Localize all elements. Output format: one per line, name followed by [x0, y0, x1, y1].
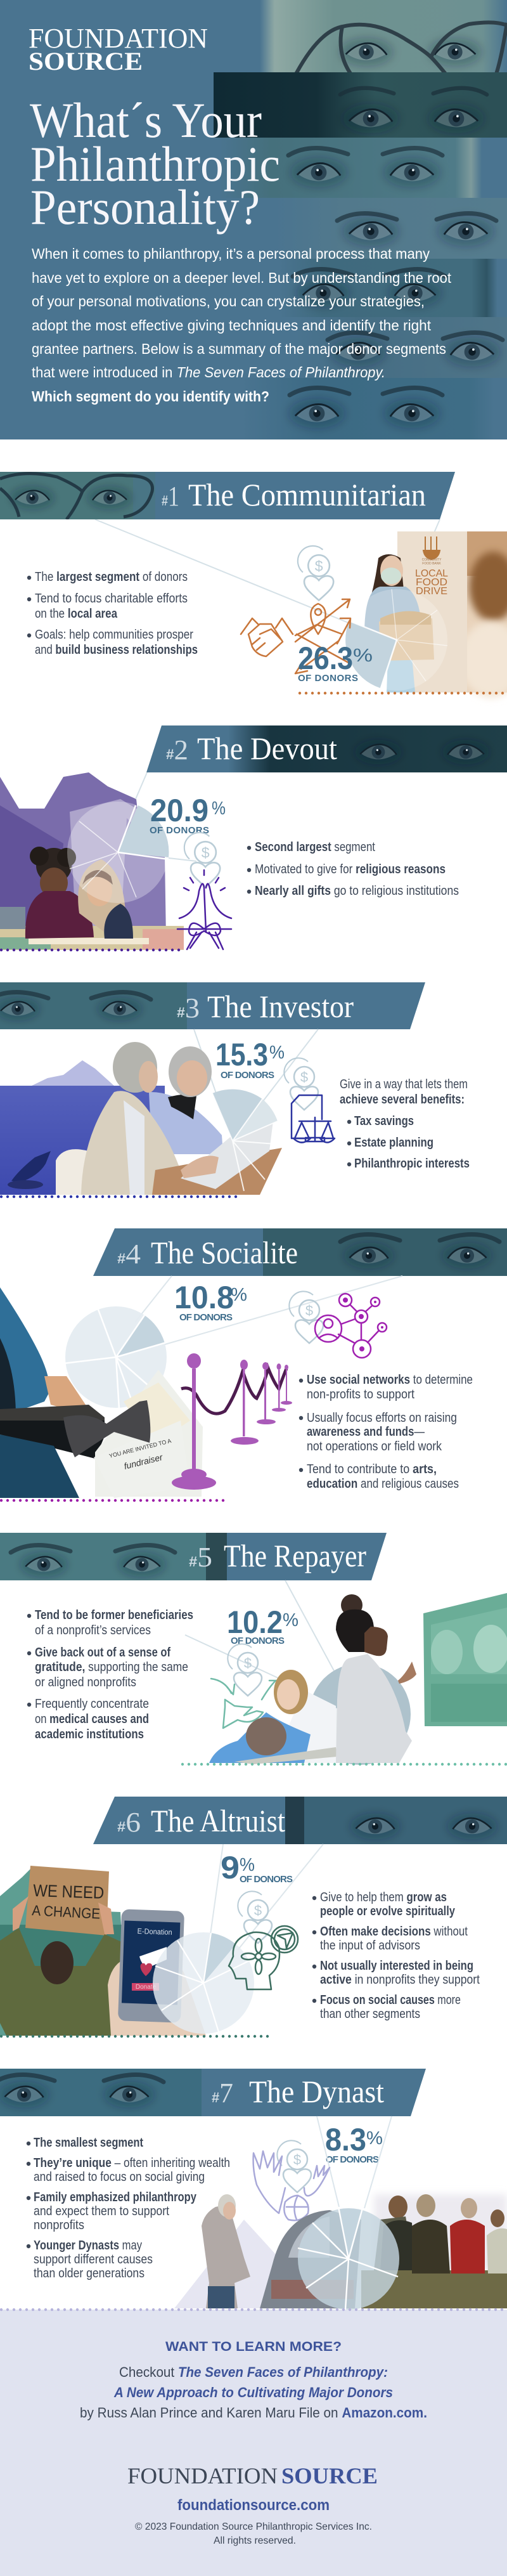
icons: dollar and head with flower and compass	[229, 1891, 298, 1989]
bullets: Tend to contribute to arts,	[307, 1462, 437, 1476]
book recommendation: A New Approach to Cultivating Major Donors	[113, 2384, 393, 2400]
intro text: have yet to explore on a deeper level. But by understanding the root	[32, 270, 452, 286]
header band: The Dynast	[249, 2074, 384, 2109]
copyright	[135, 2521, 372, 2546]
photo: phone with E-Donation: Donate	[136, 1984, 157, 1991]
connector lines	[185, 1580, 336, 1690]
pie chart	[67, 772, 196, 903]
panel: #3 The Investor	[0, 982, 470, 1197]
title: What´s Your	[30, 93, 262, 148]
photo: protester with sign: WE NEED	[33, 1881, 105, 1903]
text block: Tax savings	[354, 1114, 414, 1128]
connector lines	[317, 2116, 392, 2208]
stat: 8.3%: 8.3	[325, 2122, 366, 2157]
book recommendation	[80, 2364, 427, 2421]
header band	[0, 472, 455, 519]
panel: footer	[0, 2310, 507, 2576]
book recommendation: Checkout The Seven Faces of Philanthropy:	[119, 2364, 388, 2380]
website: foundationsource.com	[177, 2497, 330, 2514]
icons: dollar, pin, arrows and handshake	[241, 546, 350, 673]
hero face strip 3	[240, 138, 480, 198]
panel: #5 The Repayer	[0, 1533, 507, 1765]
logo: Foundation Source: FOUNDATION	[29, 23, 208, 54]
photo: phone with E-Donation: E-Donation	[137, 1927, 172, 1937]
pie chart	[345, 589, 447, 691]
intro text: that were introduced in The Seven Faces of Philanthropy.	[32, 364, 385, 381]
logo: Foundation Source: FOUNDATION	[127, 2463, 278, 2488]
connector lines	[135, 1276, 402, 1344]
header band: The Devout	[197, 731, 337, 766]
photo: phone with E-Donation	[108, 1909, 206, 2036]
panel: #7 The Dynast	[0, 2069, 507, 2310]
photo: protester with sign	[0, 1866, 127, 2036]
bullets: Usually focus efforts on raising	[307, 1410, 457, 1425]
bullets: Use social networks to determine	[307, 1372, 473, 1387]
photo: food drive: COMMUNITY	[422, 558, 442, 562]
bullets: Give to help them grow as	[320, 1890, 447, 1904]
text block: Give in a way that lets them	[340, 1077, 468, 1091]
photo: protester with sign: A CHANGE	[32, 1902, 101, 1922]
bullets	[247, 840, 459, 898]
bullets: Nearly all gifts go to religious institutions	[255, 883, 459, 898]
dotted rule	[300, 692, 507, 694]
bullets: on the local area	[35, 606, 117, 621]
text block: Estate planning	[354, 1135, 433, 1150]
header band: The Investor	[207, 989, 354, 1024]
bullets: Focus on social causes more	[320, 1993, 461, 2007]
dotted rule	[1, 2308, 507, 2311]
dotted rule	[1, 2035, 269, 2038]
pie chart	[309, 1663, 411, 1765]
hero face strip 2	[214, 72, 507, 138]
bullets: the input of advisors	[320, 1938, 420, 1953]
photo: food drive: FOOD BANK	[422, 562, 441, 566]
stat: 15.3%: %	[269, 1043, 285, 1063]
dotted rule	[1, 949, 184, 951]
photo: food drive: LOCAL	[415, 568, 448, 579]
header band: #3	[177, 992, 200, 1024]
bullets	[312, 1890, 480, 2021]
bullets: Give back out of a sense of	[35, 1645, 170, 1660]
stat: 9%: %	[240, 1855, 255, 1875]
stat: 10.8%	[174, 1280, 247, 1323]
stat: 15.3%: 15.3	[215, 1037, 268, 1072]
bullets: of a nonprofit’s services	[35, 1623, 151, 1637]
hero face strip 6	[324, 317, 507, 378]
connector lines	[95, 519, 440, 623]
stat: 10.2%: %	[283, 1610, 298, 1630]
bullets: gratitude, supporting the same	[35, 1660, 188, 1674]
icons: dollar and network	[289, 1291, 387, 1358]
connector lines	[210, 1844, 323, 1950]
bullets: Family emphasized philanthropy	[34, 2190, 196, 2204]
text block	[340, 1077, 470, 1171]
bullets: and build business relationships	[35, 642, 198, 657]
panel: #2 The Devout	[0, 725, 507, 950]
icon: dollar and giving hand	[211, 1644, 282, 1728]
bullets: support different causes	[34, 2252, 153, 2267]
bullets: not operations or field work	[307, 1439, 442, 1454]
icons: dollar and scales	[284, 1058, 335, 1143]
photo: family seated on stone wall	[361, 2194, 507, 2308]
bullets: Often make decisions without	[320, 1924, 468, 1939]
bullets: Goals: help communities prosper	[35, 627, 193, 642]
icons: dollar and praying hands with bow	[177, 833, 231, 949]
photo: invitation with bow tie and stanchions	[63, 1353, 292, 1498]
copyright: All rights reserved.	[214, 2535, 296, 2546]
photo: doctor and brain scan	[336, 1593, 507, 1763]
hero face strip 4	[335, 198, 507, 259]
logo: Foundation Source	[127, 2463, 378, 2488]
stat: 10.2%: 10.2	[227, 1604, 283, 1640]
photo: food drive: DRIVE	[416, 586, 447, 597]
panel: #1 The Communitarian	[0, 472, 507, 698]
intro text: adopt the most effective giving techniques and identify the right	[32, 317, 432, 334]
bullets: Frequently concentrate	[35, 1696, 149, 1711]
header band: The Communitarian	[188, 477, 426, 512]
pie chart	[298, 2207, 399, 2310]
pie chart	[63, 1306, 167, 1409]
bullets	[27, 1608, 193, 1741]
photo: invitation with bow tie and stanchions: fundraiser	[123, 1452, 164, 1471]
bullets: on medical causes and	[35, 1712, 149, 1726]
stat: 8.3%: OF DONORS	[326, 2154, 379, 2165]
header band: #5	[189, 1542, 212, 1573]
pie chart	[153, 1932, 254, 2034]
bullets: awareness and funds—	[307, 1424, 425, 1439]
header band	[146, 725, 507, 772]
pie chart	[212, 1090, 284, 1191]
stat: 10.2%: OF DONORS	[231, 1636, 285, 1646]
bullets: The largest segment of donors	[35, 569, 188, 584]
header band	[0, 1533, 387, 1580]
stat: 26.3%: 26.3	[298, 641, 353, 676]
stat: 15.3%: OF DONORS	[221, 1070, 274, 1081]
stat: 9%	[221, 1850, 293, 1885]
stat: 20.9%	[150, 793, 226, 836]
bullets	[299, 1372, 473, 1491]
dotted rule	[183, 1763, 507, 1766]
logo: Foundation Source	[29, 23, 208, 75]
bullets: non-profits to support	[307, 1387, 414, 1402]
bullets: active in nonprofits they support	[320, 1972, 480, 1987]
bullets: people or evolve spiritually	[320, 1904, 455, 1918]
stat: 26.3%	[298, 641, 373, 684]
title	[30, 93, 280, 235]
header band	[93, 1797, 507, 1844]
header band	[0, 2069, 426, 2116]
photo: invitation with bow tie and stanchions: YOU ARE INVITED TO A	[108, 1438, 172, 1459]
header band: The Altruist	[151, 1803, 285, 1838]
intro text: When it comes to philanthropy, it’s a personal process that many	[32, 245, 430, 262]
intro text: grantee partners. Below is a summary of the major donor segments	[32, 341, 446, 357]
stat: 20.9%: OF DONORS	[150, 825, 209, 836]
header band: #2	[166, 734, 188, 765]
stat: 8.3%	[325, 2122, 383, 2165]
bullets: The smallest segment	[34, 2135, 143, 2150]
bullets	[27, 569, 198, 657]
bullets: academic institutions	[35, 1727, 144, 1741]
panel: hero	[0, 0, 507, 439]
stat: 20.9%: 20.9	[150, 793, 209, 828]
logo: Foundation Source: SOURCE	[29, 47, 143, 75]
photo: pianist	[0, 1287, 105, 1498]
photo: purple temple and children	[0, 772, 184, 950]
stat: 10.8%: 10.8	[174, 1280, 234, 1315]
dotted rule	[1, 1499, 226, 1502]
text block: achieve several benefits:	[340, 1092, 465, 1107]
header band: #1	[162, 481, 179, 512]
copyright: © 2023 Foundation Source Philanthropic Services Inc.	[135, 2521, 372, 2532]
call to action heading: WANT TO LEARN MORE?	[165, 2339, 342, 2354]
panel: #4 The Socialite	[0, 1228, 507, 1500]
icon: dollar, hands and globe	[254, 2140, 330, 2220]
intro text: of your personal motivations, you can crystalize your strategies,	[32, 293, 425, 309]
bullets: and raised to focus on social giving	[34, 2169, 205, 2184]
header band	[0, 982, 425, 1029]
header band: The Repayer	[224, 1538, 366, 1573]
text block: Philanthropic interests	[354, 1156, 470, 1171]
bullets: Younger Dynasts may	[34, 2238, 143, 2253]
photo: older couple, sea and dolphin	[0, 1042, 282, 1195]
connector lines	[194, 1029, 318, 1141]
bullets: than older generations	[34, 2266, 144, 2280]
bullets: or aligned nonprofits	[35, 1675, 136, 1689]
book recommendation: by Russ Alan Prince and Karen Maru File on Amazon.com.	[80, 2405, 427, 2421]
stat: 26.3%: OF DONORS	[298, 673, 358, 684]
bullets: Second largest segment	[255, 840, 375, 854]
bullets: Not usually interested in being	[320, 1958, 473, 1973]
bullets: nonprofits	[34, 2218, 84, 2232]
bullets: than other segments	[320, 2007, 420, 2021]
bullets: They’re unique – often inheriting wealth	[34, 2156, 230, 2170]
logo: Foundation Source: SOURCE	[281, 2463, 378, 2488]
header band: #6	[117, 1807, 141, 1838]
title: Philanthropic	[30, 136, 280, 192]
bullets: Motivated to give for religious reasons	[255, 862, 446, 876]
stat: 8.3%: %	[366, 2128, 383, 2149]
intro text: Which segment do you identify with?	[32, 388, 269, 405]
stat: 26.3%: %	[353, 646, 373, 666]
bullets: Tend to be former beneficiaries	[35, 1608, 193, 1622]
header band: The Socialite	[151, 1235, 298, 1270]
hero face strip 1	[261, 0, 507, 72]
photo: food drive: FOOD	[416, 577, 447, 588]
bullets: and expect them to support	[34, 2204, 169, 2218]
header band: #4	[117, 1239, 141, 1270]
dotted rule	[1, 1195, 240, 1198]
title: Personality?	[30, 179, 260, 235]
bullets	[27, 2135, 230, 2280]
stat: 20.9%: %	[212, 798, 226, 819]
header band: #7	[212, 2078, 233, 2109]
hero face strip 5	[290, 259, 496, 317]
panel: #6 The Altruist	[0, 1797, 507, 2036]
stat: 10.8%: %	[231, 1285, 247, 1305]
bullets: education and religious causes	[307, 1476, 459, 1491]
stat: 9%: 9	[221, 1850, 240, 1885]
stat: 9%: OF DONORS	[240, 1874, 293, 1885]
bullets: Tend to focus charitable efforts	[35, 591, 188, 606]
photo: woman charging car with solar panels	[174, 2194, 361, 2308]
photo: food drive	[364, 531, 507, 698]
header band	[93, 1228, 507, 1276]
stat: 10.8%: OF DONORS	[179, 1312, 233, 1323]
hero face strip 7	[281, 378, 478, 439]
intro text	[32, 245, 452, 405]
photo: child in hospital bed	[209, 1670, 337, 1764]
